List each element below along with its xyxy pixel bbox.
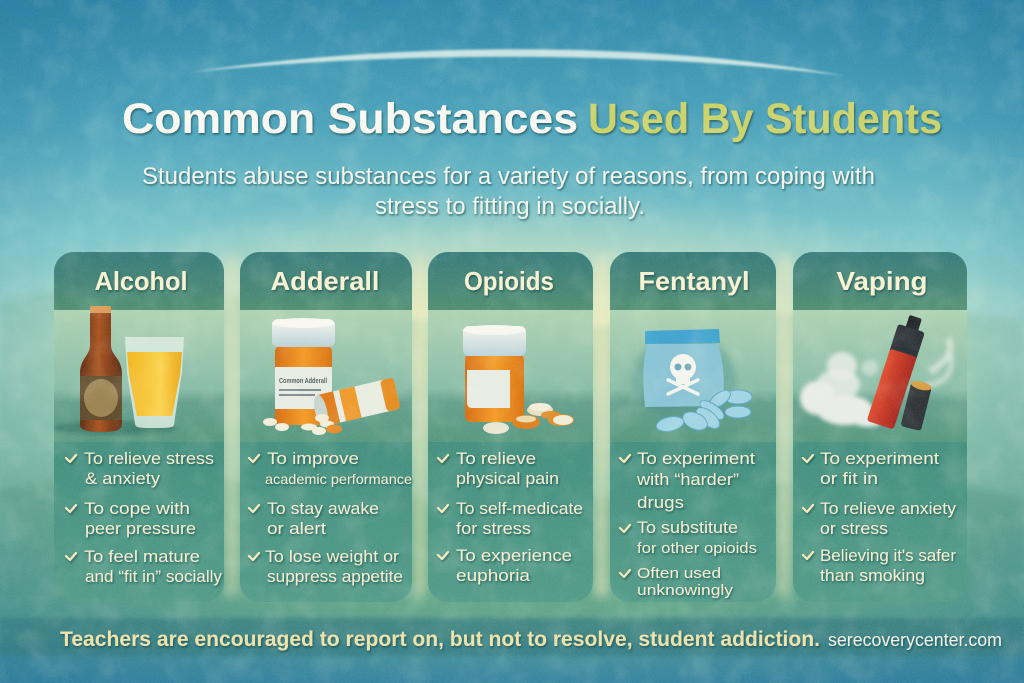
heading: alcohol: Alcohol: [94, 266, 188, 296]
footer website: serecoverycenter.com: [828, 630, 1002, 650]
title: [122, 95, 942, 143]
checklist: fentanyl: unknowingly: [637, 582, 734, 599]
icon: beer glass: [125, 337, 184, 428]
checklist: adderall: To stay awake: [267, 499, 379, 518]
checklist: alcohol: To cope with: [84, 499, 190, 518]
checklist: alcohol: & anxiety: [85, 469, 161, 488]
checklist: adderall: academic performance: [265, 471, 412, 487]
checklist: alcohol: and “fit in” socially: [85, 567, 222, 586]
icon: pill bottle upright: Common Adderall: [279, 378, 327, 385]
checklist: adderall: To improve: [267, 449, 359, 468]
icon: pill bottle: [463, 325, 526, 422]
checklist: adderall: suppress appetite: [267, 567, 403, 586]
checklist: vaping: To relieve anxiety: [820, 499, 957, 518]
panel: opioids: [428, 252, 593, 602]
checklist: alcohol: To feel mature: [84, 547, 200, 566]
checklist: opioids: physical pain: [456, 469, 559, 488]
checklist: alcohol: To relieve stress: [84, 449, 214, 468]
footer band: [0, 618, 1024, 656]
icon: powder bag with skull: [632, 329, 736, 420]
icon: vape pen: [868, 315, 924, 429]
icon: pills: [483, 403, 574, 434]
panel: alcohol: [53, 252, 224, 602]
checklist: fentanyl: drugs: [637, 493, 684, 512]
checklist: vaping: To experiment: [820, 449, 939, 468]
icon: spilled pills: [263, 414, 342, 435]
checklist: fentanyl: To experiment: [637, 449, 755, 468]
subtitle: Students abuse substances for a variety of reasons, from coping with: [142, 163, 875, 190]
checklist: fentanyl: for other opioids: [637, 540, 757, 557]
decorative arc highlight: [192, 49, 845, 76]
checklist: adderall: or alert: [267, 519, 326, 538]
icon: pill bottle upright: [272, 318, 335, 425]
footer message: Teachers are encouraged to report on, but not to resolve, student addiction.: [60, 628, 820, 651]
subtitle: [142, 163, 875, 220]
checklist: vaping: [803, 449, 957, 585]
panel: fentanyl: [610, 252, 776, 602]
checklist: opioids: To self-medicate: [456, 499, 583, 518]
title: Used By Students: [588, 95, 942, 143]
icon: vape cap: [900, 379, 932, 431]
icon: vapor cloud: [800, 338, 951, 427]
checklist: vaping: Believing it's safer: [820, 546, 956, 565]
subtitle: stress to fitting in socially.: [375, 193, 645, 220]
checklist: opioids: To experience: [456, 546, 572, 565]
heading: vaping: Vaping: [836, 266, 928, 296]
checklist: fentanyl: [620, 449, 757, 599]
checklist: opioids: To relieve: [456, 449, 536, 468]
heading: fentanyl: Fentanyl: [638, 266, 750, 296]
checklist: opioids: for stress: [456, 519, 531, 538]
heading: adderall: Adderall: [270, 266, 380, 296]
checklist: adderall: To lose weight or: [265, 547, 399, 566]
title: Common Substances: [122, 95, 578, 143]
checklist: fentanyl: with “harder”: [636, 470, 739, 489]
checklist: opioids: [438, 449, 583, 585]
heading: opioids: Opioids: [464, 266, 554, 296]
checklist: alcohol: [66, 449, 222, 586]
checklist: vaping: than smoking: [820, 566, 925, 585]
checklist: vaping: or fit in: [820, 469, 878, 488]
checklist: vaping: or stress: [820, 519, 888, 538]
checklist: fentanyl: To substitute: [637, 518, 738, 537]
icon: beer bottle: [53, 306, 177, 435]
icon: blue pills: [655, 387, 752, 434]
checklist: fentanyl: Often used: [637, 565, 721, 582]
panel: vaping: [793, 252, 967, 602]
checklist: opioids: euphoria: [456, 566, 531, 585]
checklist: adderall: [249, 449, 412, 586]
panel: adderall: [240, 252, 412, 602]
icon: pill bottle on side: [314, 378, 400, 424]
checklist: alcohol: peer pressure: [85, 519, 196, 538]
